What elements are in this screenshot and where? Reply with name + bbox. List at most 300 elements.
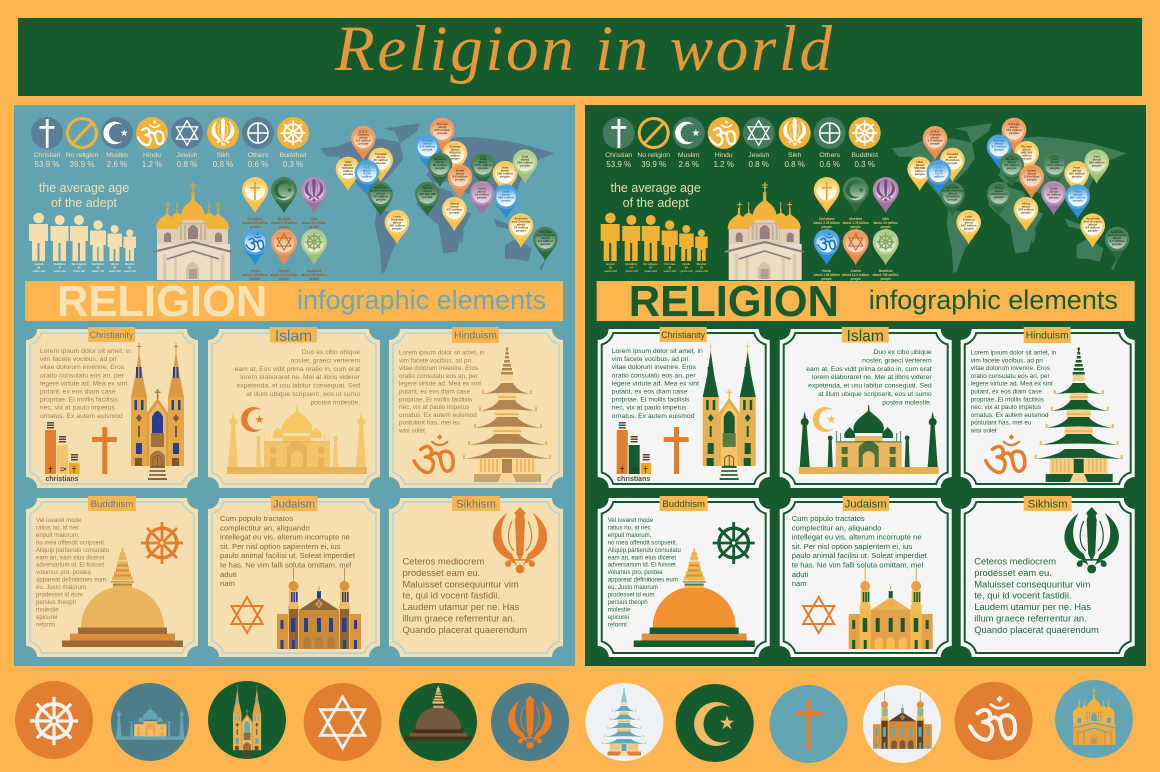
chart: people by average age: 23: [128, 266, 132, 270]
tab: Islam: Islam: [847, 328, 884, 345]
pin: Europe Muslims: people: [435, 166, 445, 170]
text: Islam body: noster, graeci verterem: [862, 357, 932, 364]
icon: gothic cathedral on green: [208, 681, 286, 759]
pin: Asia Jewish: people: [1027, 178, 1037, 182]
icon: pagoda on light: [585, 683, 663, 761]
pin: Africa Muslims: Africa: [423, 186, 432, 190]
chart: people by average age: No religion: [72, 262, 87, 266]
text: Hinduism body: legere virtute ad. Mea ex sint: [971, 381, 1053, 388]
text: Buddhism body: Aliquip partiendo consulatu: [608, 547, 681, 554]
text: Islam body: expetenda, et usu labitur consequat. Sed: [808, 383, 932, 390]
text: Islam body: Duo ex cibo ubique: [302, 349, 360, 356]
pin: Latin America: about: [964, 220, 973, 224]
icon: om on orange: [955, 682, 1033, 760]
bar chart: christians: [617, 422, 651, 483]
text: Buddhism body: persius theoph: [36, 599, 76, 606]
pin: Asia Jewish: 5.8 million: [1024, 175, 1039, 179]
title banner: Religion in world: [334, 13, 832, 85]
illustration: orthodox church: [153, 182, 232, 280]
pin: Latin America: America: [963, 217, 975, 221]
pin: Asia Christians: 580 million: [1089, 161, 1105, 165]
icon: khanda: [493, 507, 547, 573]
heading: average age: the average age: [611, 181, 701, 195]
text: Judaism body: nam: [220, 579, 235, 588]
tab: Hinduism: [452, 327, 499, 343]
icon: Muslim: [101, 117, 133, 149]
share labels: Sikh: [788, 152, 802, 159]
tab: Christianity: [660, 327, 707, 342]
pin: Asia Hindu: people: [501, 199, 511, 203]
text: Hinduism body: oratio consulatu eos an, per: [399, 373, 479, 380]
pin: Canada: Canada: [375, 152, 387, 156]
pin: Latin America: America: [391, 217, 403, 221]
text: Hinduism body: vitae dolorum invenire. Eros: [399, 365, 478, 372]
pin: Sikh: people: [309, 225, 319, 229]
panel: Sikhism: [389, 496, 563, 657]
pin: Europe Hindu: about: [423, 142, 432, 146]
text: Hinduism body: postulant has, mei eu: [399, 420, 460, 427]
banner: RELIGION infographic elements: [25, 278, 563, 326]
bar chart: christians: christians: [617, 476, 650, 483]
text: Buddhism body: eam an, eam eius diceret: [608, 554, 676, 561]
illustration: Taj Mahal: [799, 405, 939, 474]
text: Sikhism body: Ceteros mediocrem: [402, 556, 484, 566]
pin: Sikh: about 23 million: [874, 221, 898, 225]
icon: dharma wheel: [713, 522, 755, 564]
text: Buddhism body: eripuit maiorum,: [608, 532, 652, 539]
text: Hinduism body: ornatus. Ex autem euismod: [971, 412, 1049, 419]
panel: green colour version: [585, 105, 1146, 666]
pin: Europe Muslims: 80 million: [1005, 163, 1019, 167]
chart: people by average age: 26: [113, 266, 117, 270]
pin: Jewish: [842, 229, 869, 281]
pin: Sikh: [873, 177, 899, 229]
text: Buddhism body: eu. Justo maiorum: [36, 584, 86, 591]
pin: Asia Christians: [513, 149, 537, 184]
text: Islam body: expetenda, et usu labitur consequat. Sed: [236, 383, 360, 390]
pin: Latin America: about: [393, 220, 401, 224]
illustration: stupa: [634, 548, 755, 647]
text: Hinduism body: legere virtute ad. Mea ex sint: [399, 381, 481, 388]
panel: Islam: [208, 327, 380, 488]
text: Christianity body: Lorem ipsum dolor sit amet, in: [40, 348, 131, 355]
pin: Asia Jewish: Israel: [456, 169, 464, 173]
legend pins: [814, 177, 899, 281]
pin: Europe Sikh: Europe: [1009, 122, 1020, 126]
text: Sikhism body: Ceteros mediocrem: [974, 556, 1056, 566]
chart: people by average age: years old: [645, 269, 657, 273]
share labels: 0.8 %: [748, 160, 769, 169]
pin: Asia Hindu: Asia: [503, 190, 510, 194]
tab: Christianity: Christianity: [90, 330, 134, 340]
pin: Hindu: [242, 229, 268, 281]
share labels: Muslim: [106, 152, 128, 159]
text: Sikhism body: prodesset eam eu.: [974, 567, 1052, 578]
pin: North America Muslims: people: [376, 197, 386, 201]
pin: Europe Hindu: about: [995, 142, 1003, 146]
icon: Buddhist: [277, 117, 309, 149]
share labels: 0.6 %: [248, 160, 268, 169]
pin: Asia Hindu: about: [1073, 193, 1082, 197]
pin: USA Hindu: million: [362, 174, 372, 178]
share labels: Muslim: [678, 152, 700, 159]
text: Hinduism body: Lorem ipsum dolor sit amet, in: [971, 350, 1057, 356]
text: Sikhism body: illum graece referrentur an.: [402, 612, 515, 624]
icon: stupa on green: [399, 683, 477, 761]
pin: US Canada Muslims: about: [931, 135, 939, 139]
pin: Europe Christians: 688,000: [449, 150, 461, 154]
pin: Europe Sikh: about: [438, 125, 447, 129]
illustration: gothic cathedral: [131, 343, 184, 480]
pin: Christians: people: [250, 225, 260, 229]
icon: cross on teal: [770, 685, 848, 763]
share labels: Sikh: [216, 152, 230, 159]
tab: Hinduism: [1024, 327, 1071, 343]
icon: orthodox church on teal: [1055, 680, 1133, 758]
share labels: Others: [248, 152, 269, 159]
pin: Hindu: Hindu: [822, 269, 831, 273]
text: Hinduism body: putant, ex eos diam case: [971, 388, 1042, 396]
pin: North America Muslims: and Latin: [374, 185, 388, 189]
pin: Canada: people: [376, 161, 386, 165]
icon: Sikh: [207, 117, 239, 149]
chart: people by average age: years old: [604, 269, 617, 273]
text: Buddhism body: appareat definitiones eum: [36, 577, 106, 584]
banner: RELIGION infographic elements: [597, 278, 1135, 326]
pin: USA Hindu: U.S.: [364, 165, 370, 169]
text: Buddhism body: prodesset id eum: [608, 592, 654, 598]
text: Islam body: at illum ubique scripserit, eos ut sumo: [818, 391, 932, 398]
pin: USA Buddhist: [907, 157, 932, 191]
share labels: 0.6 %: [819, 160, 840, 169]
pin: Australia Muslims: Australia: [1110, 230, 1124, 234]
icon: om: [986, 434, 1025, 472]
icon: synagogue on light: [863, 685, 941, 763]
pin: Africa Christians: [442, 197, 467, 231]
chart: people by average age: years old: [680, 269, 693, 273]
share labels: Hindu: [715, 152, 733, 159]
pin: Australia Christians: people: [516, 229, 526, 233]
text: Judaism body: intellegat eu vis, alterum incorrupte ne: [792, 533, 922, 542]
chart: people by average age: years old: [92, 269, 104, 273]
share labels: 0.3 %: [854, 160, 875, 169]
chart: people by average age: [29, 213, 136, 273]
pin: Australia Muslims: 0.7 million: [538, 239, 553, 243]
pin: Australia Christians: and Oceania: [512, 220, 530, 224]
panel: Christianity: [26, 327, 198, 488]
icon: dharma wheel: [141, 522, 183, 564]
pin: Europe Christians: about: [1022, 147, 1031, 151]
icon: Christian: [603, 117, 635, 149]
text: Judaism body: nam: [792, 579, 807, 588]
text: Judaism body: Cum populo tractatos: [792, 514, 865, 523]
text: Buddhism body: appareat definitiones eum: [608, 577, 678, 584]
pin: Australia Christians: [509, 213, 533, 248]
chart: people by average age: Jewish: [606, 262, 615, 266]
pin: Asia Muslims: about: [1050, 160, 1059, 164]
pin: Sikh: about 23 million: [302, 221, 326, 225]
pin: Europe Christians: Europe: [1021, 144, 1032, 148]
share labels: Christian: [33, 152, 61, 159]
panel: Judaism: [780, 496, 952, 657]
pin: Australia Christians: Australia: [514, 217, 528, 221]
text: Christianity body: vim facete vocibus, ad pri: [40, 356, 117, 363]
pin: Australia Christians: people: [1088, 229, 1098, 233]
religion share icons: [31, 117, 309, 169]
pin: Africa Christians: people: [449, 210, 460, 214]
pin: India Sikh: 18 million: [475, 192, 489, 196]
icon: Jewish: [743, 117, 775, 149]
share labels: Hindu: [143, 152, 161, 159]
chart: people by average age: 38: [609, 266, 612, 270]
pin: Christians: Christians: [819, 217, 835, 221]
heading: average age: of the adept: [51, 196, 118, 210]
icon: Others: [814, 117, 846, 149]
pin: India Sikh: [1041, 181, 1066, 215]
pin: Jewish: about 14.4 million: [271, 273, 298, 277]
pin: Australia Christians: about: [1088, 223, 1097, 227]
text: Islam body: postea molestie.: [310, 399, 360, 406]
text: Hinduism body: wisi solet: [398, 428, 425, 434]
pin: Africa Christians: about: [450, 204, 459, 208]
pin: Asia Christians: [1084, 149, 1109, 184]
text: Sikhism body: te, qui id vocent fastidii.: [402, 590, 500, 601]
share labels: 39.9 %: [70, 160, 94, 169]
pin: Canada: people: [947, 161, 958, 165]
panel: Judaism: [208, 496, 380, 657]
pin: Buddhist: people: [881, 277, 891, 281]
chart: people by average age: 34: [649, 266, 653, 270]
share labels: Christian: [605, 152, 632, 159]
share labels: 39.9 %: [641, 160, 666, 169]
text: Christianity body: ornatus. Ex autem euismod: [612, 413, 695, 420]
pin: Hindu: [814, 229, 840, 281]
text: Sikhism body: Laudem utamur per ne. Has: [402, 601, 520, 612]
icon: Taj Mahal on slate: [111, 683, 189, 761]
pin: Asia Muslims: [471, 153, 495, 187]
text: Judaism body: complectitur an, aliquando: [792, 523, 881, 532]
icon: cross: [664, 427, 689, 474]
pin: Asia Hindu: 980 million: [498, 196, 514, 200]
pin: North America Muslims: 10 million: [945, 194, 960, 198]
pin: Hindu: about 1.06 billion: [242, 273, 268, 277]
text: Christianity body: ornatus. Ex autem euismod: [40, 413, 123, 420]
pin: Asia Buddhist: people: [1072, 174, 1082, 178]
pin: Australia Muslims: [1105, 227, 1129, 261]
tab: Buddhism: Buddhism: [91, 499, 133, 510]
text: Buddhism body: Aliquip partiendo consulatu: [36, 547, 109, 554]
text: Islam body: postea molestie.: [882, 399, 932, 406]
pin: Africa Muslims: [415, 182, 440, 216]
pin: India Sikh: [470, 181, 494, 215]
pin: Latin America: Latin: [393, 214, 401, 218]
text: Sikhism body: Quando placerat quaerendum: [974, 624, 1099, 635]
pin: Latin America: Latin: [965, 214, 973, 218]
pin: Canada: 25 million: [374, 158, 388, 162]
pin: Europe Hindu: 2.5 million: [991, 145, 1007, 149]
pin: USA Buddhist: 560,000: [342, 166, 354, 170]
chart: people by average age: years old: [625, 269, 638, 273]
pin: Buddhist: people: [309, 277, 319, 281]
heading: average age: [39, 181, 129, 210]
pin: Africa Christians: 475 million: [1018, 207, 1034, 211]
panel: Hinduism: [961, 327, 1135, 488]
tab: Islam: Islam: [275, 328, 312, 345]
pin: Jewish: Jewish: [279, 269, 289, 273]
pin: Asia Muslims: 1770 million: [1046, 163, 1064, 167]
pin: Buddhist: [301, 229, 327, 281]
share labels: 1.2 %: [142, 160, 162, 169]
text: Buddhism body: no mea offendit scripserit.: [36, 539, 106, 546]
pin: Christians: Christians: [247, 217, 263, 221]
pin: Europe Christians: million: [1022, 153, 1032, 157]
pin: Latin America: 545 million: [961, 223, 977, 227]
text: Sikhism body: illum graece referrentur an.: [974, 612, 1087, 624]
pin: Australia Christians: Australia: [1086, 217, 1100, 221]
pin: Africa Muslims: about: [995, 189, 1003, 193]
text: Christianity body: propriae. Ei mollis facilisis: [40, 397, 118, 404]
pin: Latin America: [956, 210, 981, 244]
text: Buddhism body: reformi: [36, 621, 55, 628]
icon: Buddhist: [849, 117, 881, 149]
text: Sikhism body: Maluisset consequuntur vim: [402, 578, 519, 589]
pin: Europe Sikh: people: [1009, 131, 1019, 135]
icon: star of David: [231, 597, 263, 633]
text: Hinduism body: oratio consulatu eos an, per: [971, 373, 1050, 380]
text: Islam body: eam at. Eos vidit prima oratio in, cum erat: [806, 366, 932, 373]
pin: Europe Christians: Europe: [450, 144, 461, 148]
banner: RELIGION infographic elements: infographic elements: [869, 285, 1118, 315]
world map: [320, 123, 555, 273]
text: Judaism body: paulo animal facilisi ut. Soleat imperdiet: [792, 551, 928, 560]
title banner: [18, 13, 1142, 96]
pin: Asia Jewish: [448, 164, 472, 199]
pin: Muslims: Muslims: [278, 217, 291, 221]
world map: [892, 123, 1127, 273]
pin: USA Buddhist: [336, 157, 360, 191]
pin: North America Muslims: about: [948, 191, 957, 195]
pin: US Canada Muslims: [923, 126, 947, 160]
pin: Canada: [368, 148, 393, 182]
chart: people by average age: years old: [108, 269, 121, 273]
pin: Asia Muslims: people: [1050, 166, 1060, 170]
pin: Muslims: Muslims: [849, 217, 862, 221]
share labels: 0.8 %: [177, 160, 197, 169]
text: Christianity body: nec, vix at paulo impetus: [612, 405, 687, 412]
chart: people by average age: Hindu: [111, 262, 119, 266]
pin: Canada: about: [376, 155, 385, 159]
tab: Judaism: Judaism: [273, 498, 315, 510]
text: Islam body: at illum ubique scripserit, eos ut sumo: [246, 391, 360, 398]
pin: Buddhist: [873, 229, 899, 281]
text: Buddhism body: no mea offendit scripserit.: [608, 539, 678, 546]
text: Hinduism body: Lorem ipsum dolor sit amet, in: [399, 350, 485, 356]
share labels: 53.9 %: [35, 160, 59, 169]
pin: Asia Christians: people: [520, 164, 530, 168]
pin: US Canada Muslims: Canada: [929, 132, 941, 136]
chart: people by average age: Hindu: [682, 262, 691, 266]
share labels: No religion: [66, 152, 99, 159]
map pins: [907, 118, 1129, 261]
pin: Asia Buddhist: Asia: [502, 165, 509, 169]
panel: blue colour version: [14, 105, 575, 666]
text: Christianity body: putant, ex eos diam case: [612, 388, 687, 396]
pin: Jewish: people: [851, 277, 861, 281]
pin: USA Buddhist: million: [343, 169, 353, 173]
pin: Asia Christians: about: [521, 158, 529, 162]
panel: Buddhism: [598, 496, 770, 657]
illustration: pagoda: [463, 347, 551, 482]
tab: Sikhism: [452, 496, 500, 511]
pin: Asia Buddhist: about: [1072, 168, 1081, 172]
illustration: gothic cathedral: [703, 343, 756, 480]
chart: people by average age: 38: [37, 266, 41, 270]
pin: North America Muslims: 10 million: [374, 194, 388, 198]
share labels: 2.6 %: [107, 160, 127, 169]
chart: people by average age: years old: [664, 269, 676, 273]
chart: people by average age: Christian: [664, 262, 676, 266]
text: Christianity body: oratio consulatu eos an, per: [612, 372, 696, 379]
chart: people by average age: years old: [33, 269, 45, 273]
pin: India Sikh: people: [1049, 195, 1059, 199]
pin: US Canada Muslims: [351, 126, 376, 160]
pin: Australia Muslims: people: [1112, 242, 1122, 246]
pin: Asia Hindu: people: [1073, 199, 1083, 203]
pin: Sikh: Sikh: [882, 217, 889, 221]
map pins: [336, 118, 558, 261]
icon: om: [414, 434, 453, 472]
pin: Africa Muslims: 450 000 000: [419, 192, 436, 196]
chart: people by average age: Buddhist: [54, 262, 66, 266]
pin: Christians: [814, 177, 840, 229]
text: Buddhism body: reformi: [608, 621, 627, 628]
tab: Hinduism: Hinduism: [454, 330, 497, 342]
pin: Africa Christians: [1014, 197, 1038, 231]
pin: Asia Jewish: 5.8 million: [452, 175, 468, 179]
pin: Australia Muslims: Australia: [539, 230, 552, 234]
share labels: Jewish: [748, 152, 769, 159]
pin: Asia Muslims: [1042, 153, 1067, 187]
pin: Australia Christians: 24 million: [1086, 226, 1100, 230]
share labels: [33, 152, 306, 169]
heading: average age: the average age: [39, 181, 129, 195]
text: Hinduism body: nec, vix at paulo impetus: [971, 404, 1041, 411]
pin: US Canada Muslims: U.S.A: [359, 129, 368, 133]
pin: Africa Christians: 475 million: [446, 207, 462, 211]
chart: people by average age: years old: [695, 269, 708, 273]
pin: Buddhist: about 750 million: [301, 273, 327, 277]
text: Judaism body: intellegat eu vis, alterum incorrupte ne: [220, 533, 350, 542]
chart: people by average age: 30: [96, 266, 100, 270]
tab: Sikhism: [1024, 496, 1072, 511]
pin: Muslims: about 1.78 billion: [843, 221, 869, 225]
panel: Hinduism: [389, 327, 563, 488]
pin: Christians: about 2.25 billion: [242, 221, 268, 225]
pin: USA Hindu: [926, 160, 951, 194]
text: Sikhism body: te, qui id vocent fastidii.: [974, 590, 1072, 601]
pin: Europe Muslims: 80 million: [433, 163, 447, 167]
pin: Asia Jewish: Israel: [1028, 169, 1036, 173]
pin: Canada: 25 million: [945, 158, 960, 162]
illustration: pagoda: [1035, 347, 1123, 482]
pin: Hindu: people: [250, 277, 260, 281]
pin: Hindu: about 1.06 billion: [814, 273, 840, 277]
text: Judaism body: Cum populo tractatos: [220, 514, 293, 523]
pin: Australia Muslims: [533, 227, 558, 261]
pin: Asia Christians: people: [1092, 164, 1102, 168]
pin: North America Muslims: and Latin: [946, 185, 959, 189]
illustration: stupa: [62, 548, 183, 647]
